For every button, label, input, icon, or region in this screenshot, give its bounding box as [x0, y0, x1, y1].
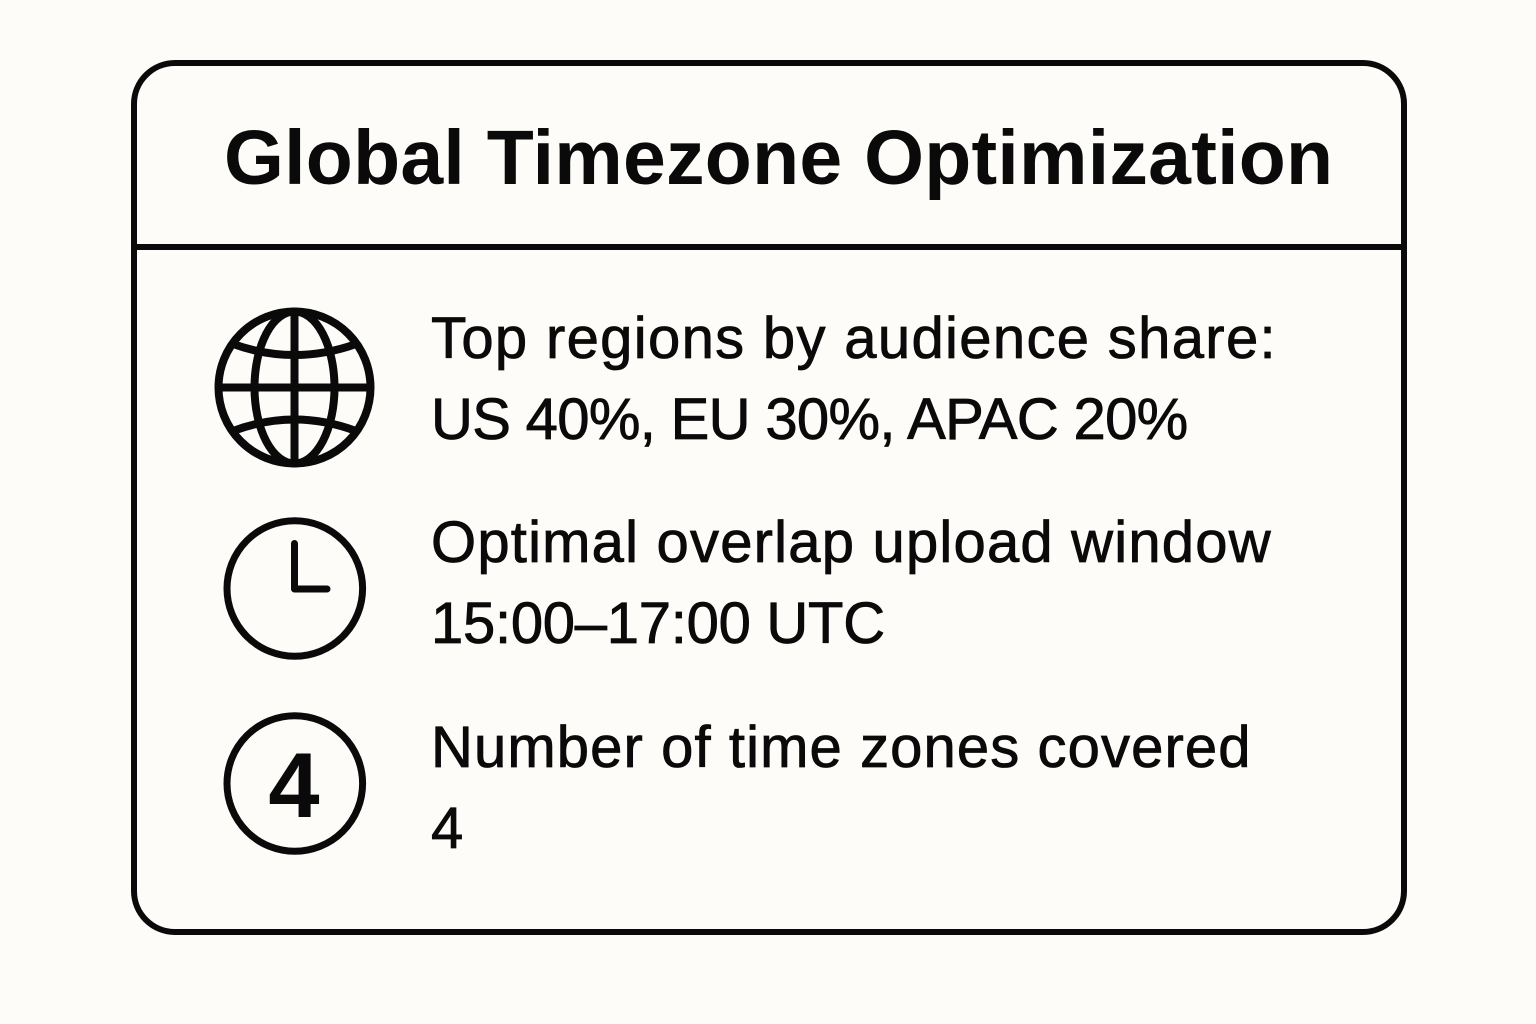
- icon: clock: [224, 517, 366, 660]
- icon: number 4 in circle: [224, 712, 366, 855]
- header divider: [133, 244, 1405, 250]
- text: time zones value: 4: [431, 796, 463, 861]
- title: Global Timezone Optimization: [224, 115, 1333, 201]
- text: upload window label: Optimal overlap upload window: [431, 510, 1272, 575]
- text: region shares: US 40%, EU 30%, APAC 20%: [431, 387, 1188, 452]
- text: top regions: Top regions by audience share:: [431, 306, 1277, 371]
- text: upload window value: 15:00–17:00 UTC: [431, 591, 885, 656]
- icon: number 4 in circle: 4: [268, 735, 320, 837]
- panel: card outline: [131, 60, 1407, 935]
- icon: globe: [214, 308, 374, 468]
- text: time zones label: Number of time zones covered: [431, 715, 1252, 780]
